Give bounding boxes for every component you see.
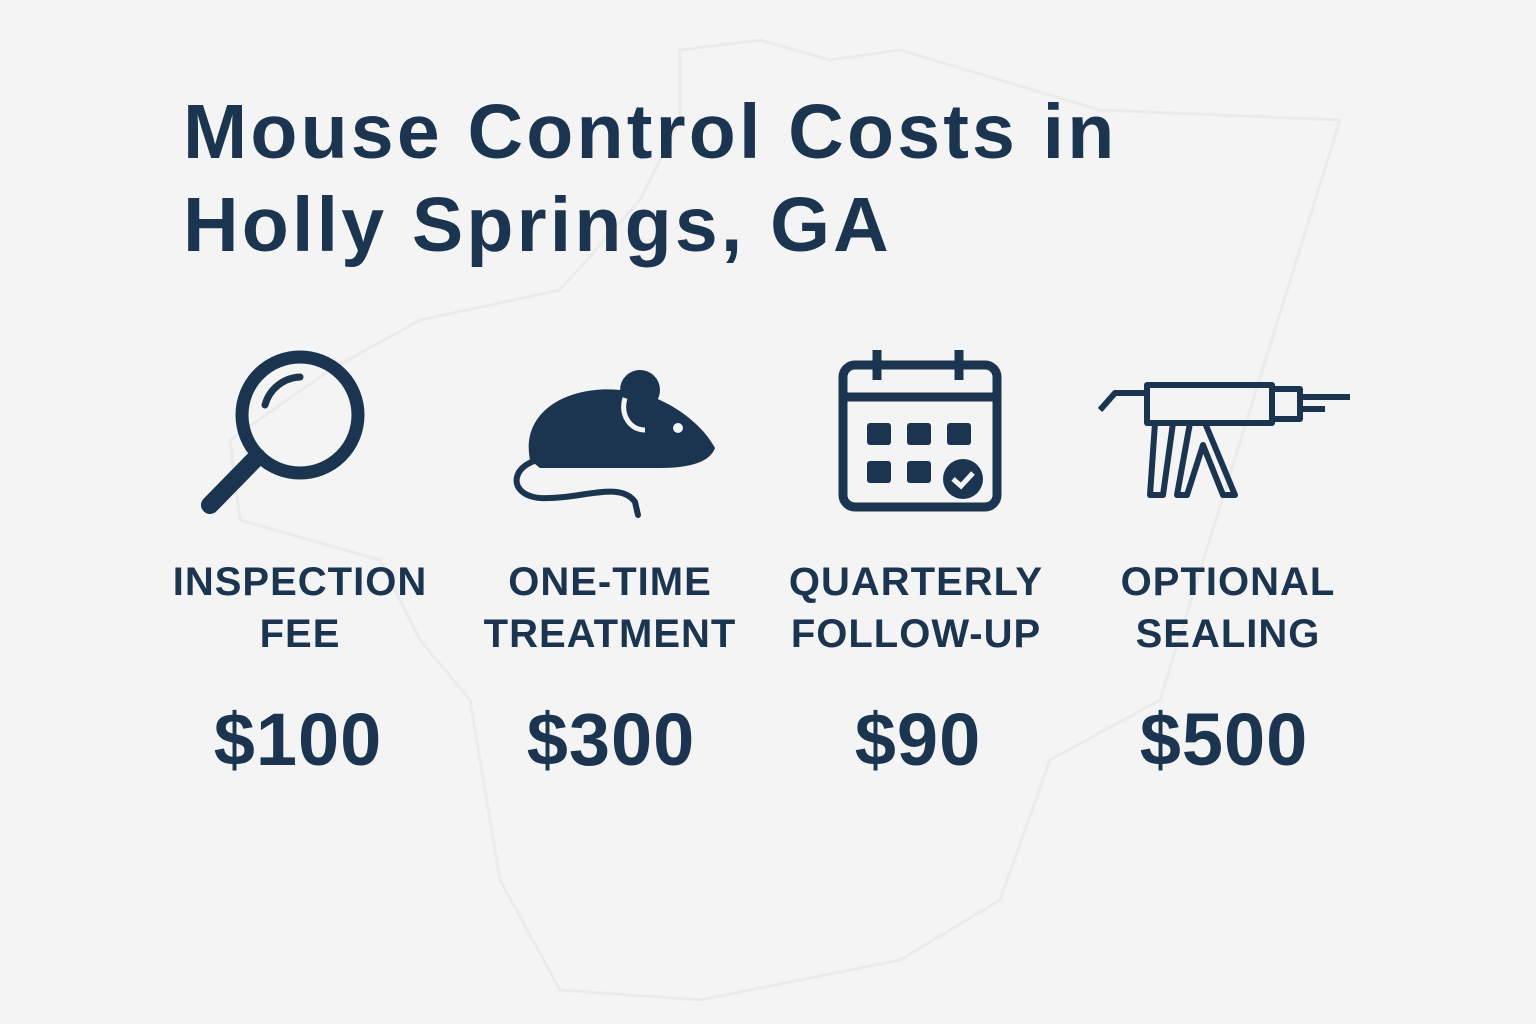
price 500: $500 — [1140, 698, 1308, 781]
label: treatment — [484, 560, 736, 656]
icon: calendar — [838, 350, 1002, 512]
title: Mouse Control Costs in — [183, 89, 1118, 175]
price 100: $100 — [214, 698, 382, 781]
label: sealing: SEALING — [1136, 612, 1320, 656]
label: inspection — [173, 560, 427, 656]
title — [183, 89, 1118, 268]
label: inspection: INSPECTION — [173, 560, 427, 604]
price 90: $90 — [855, 698, 981, 781]
label: follow-up — [789, 560, 1043, 656]
label: sealing — [1121, 560, 1335, 656]
icon: mouse — [514, 370, 715, 518]
title: Holly Springs, GA — [183, 182, 892, 268]
icon: magnifier — [201, 350, 364, 514]
price 300: $300 — [527, 698, 695, 781]
label: follow-up: FOLLOW-UP — [791, 612, 1041, 656]
label: treatment: ONE-TIME — [508, 560, 712, 604]
label: follow-up: QUARTERLY — [789, 560, 1043, 604]
icon: caulk gun — [1098, 382, 1350, 498]
label: treatment: TREATMENT — [484, 612, 736, 656]
label: sealing: OPTIONAL — [1121, 560, 1335, 604]
label: inspection: FEE — [260, 612, 340, 656]
